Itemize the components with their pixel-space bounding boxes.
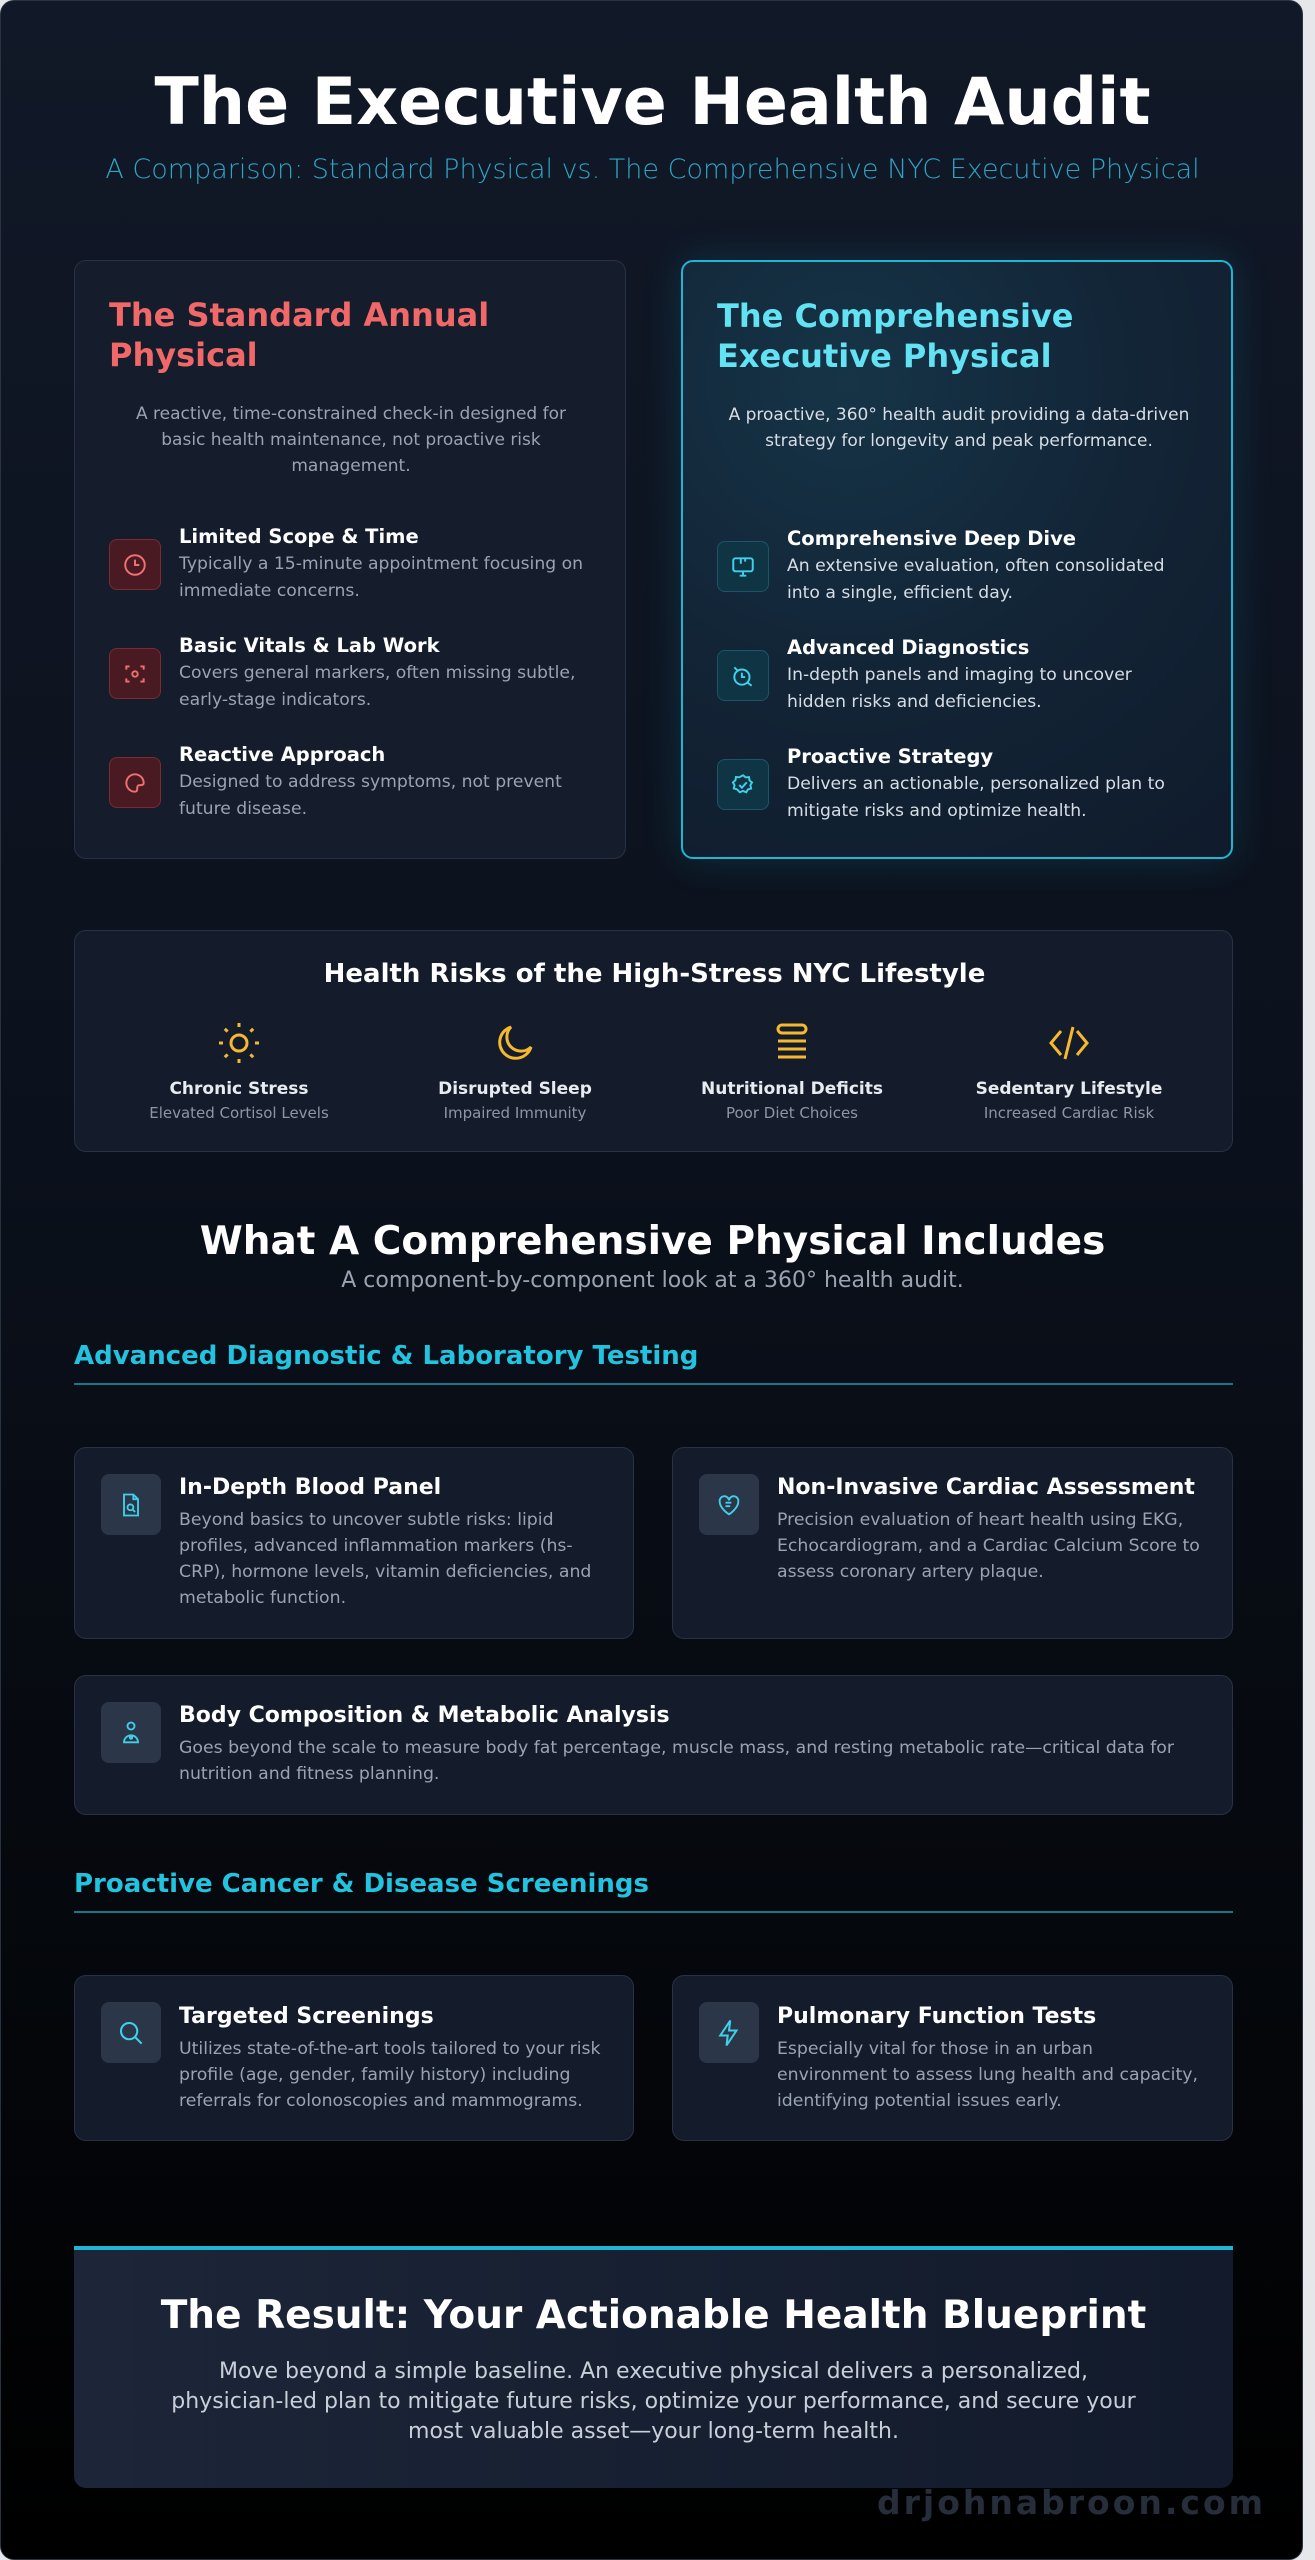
text: section subtitle: A component-by-component look at a 360° health audit.	[341, 1268, 964, 1293]
item: basic vitals	[109, 634, 575, 710]
risk: chronic stress: Chronic Stress	[169, 1079, 309, 1099]
risk: chronic stress: Elevated Cortisol Levels	[149, 1104, 329, 1122]
item: deep dive: into a single, efficient day.	[787, 583, 1013, 603]
icon: person	[101, 1702, 161, 1763]
panel: comprehensive physical	[681, 260, 1233, 859]
heading: health risks: Health Risks of the High-Stress NYC Lifestyle	[324, 959, 985, 989]
panel: health risks	[74, 930, 1233, 1152]
card: targeted screenings: referrals for colonoscopies and mammograms.	[179, 2091, 583, 2111]
item: reactive approach: Designed to address symptoms, not prevent	[179, 772, 562, 792]
risk: disrupted sleep: Disrupted Sleep	[438, 1079, 592, 1099]
text: result body: physician-led plan to mitigate future risks, optimize your performance, and secure your	[171, 2389, 1136, 2414]
icon: badge check	[717, 759, 769, 810]
item: advanced diagnostics	[717, 636, 1132, 712]
card: body composition	[74, 1675, 1233, 1815]
card: body composition: Body Composition & Metabolic Analysis	[179, 1703, 670, 1728]
card: targeted screenings: Targeted Screenings	[179, 2004, 434, 2029]
section heading: diagnostics: Advanced Diagnostic & Laboratory Testing	[74, 1341, 698, 1371]
section heading: diagnostics	[74, 1341, 1233, 1385]
card: blood panel: Beyond basics to uncover subtle risks: lipid profiles, advanced inflammation markers (hs-CRP), hormone levels, vitamin deficiencies, and metabolic function.	[179, 1510, 591, 1608]
item: advanced diagnostics: In-depth panels and imaging to uncover	[787, 665, 1132, 685]
text: comprehensive description: A proactive, 360° health audit providing a data-driven strategy for longevity and peak performance.	[729, 405, 1189, 451]
panel: standard physical	[74, 260, 626, 859]
card: cardiac: Non-Invasive Cardiac Assessment	[777, 1475, 1195, 1500]
text: result body: Move beyond a simple baseline. An executive physical delivers a personalized,	[219, 2359, 1088, 2384]
watermark: drjohnabroon.com	[877, 2483, 1266, 2522]
icon: sun	[219, 1023, 259, 1063]
item: limited scope	[109, 525, 583, 601]
card: pulmonary: Pulmonary Function Tests	[777, 2004, 1096, 2029]
card: targeted screenings: Utilizes state-of-the-art tools tailored to your risk	[179, 2039, 601, 2059]
text: standard description: A reactive, time-constrained check-in designed for basic health maintenance, not proactive risk management.	[136, 404, 566, 476]
item: proactive strategy: Proactive Strategy	[787, 745, 993, 768]
risk: nutritional deficits	[701, 1024, 883, 1122]
risk: chronic stress	[149, 1023, 329, 1122]
icon: stack	[776, 1024, 808, 1058]
card: pulmonary: environment to assess lung health and capacity,	[777, 2065, 1198, 2085]
heading: standard: The Standard Annual	[109, 296, 489, 334]
icon: scan	[109, 648, 161, 699]
text: result body	[171, 2359, 1136, 2444]
card: body composition: nutrition and fitness planning.	[179, 1764, 439, 1784]
icon: sticker	[109, 757, 161, 808]
card: body composition: Goes beyond the scale to measure body fat percentage, muscle mass, and resting metabolic rate—critical data for	[179, 1738, 1174, 1758]
risk: sedentary lifestyle	[976, 1026, 1162, 1122]
icon: monitor	[717, 541, 769, 592]
card: pulmonary: identifying potential issues early.	[777, 2091, 1062, 2111]
item: proactive strategy	[717, 745, 1165, 821]
heading: standard	[109, 296, 489, 374]
icon: search	[101, 2002, 161, 2063]
heading: result: The Result: Your Actionable Health Blueprint	[161, 2293, 1146, 2338]
item: reactive approach	[109, 743, 562, 819]
icon: clock	[109, 539, 161, 590]
icon: clock search	[717, 650, 769, 701]
card: pulmonary	[672, 1975, 1233, 2141]
heading: comprehensive: The Comprehensive	[717, 297, 1074, 335]
title: The Executive Health Audit	[154, 65, 1151, 140]
item: advanced diagnostics: Advanced Diagnostics	[787, 636, 1029, 659]
card: blood panel: In-Depth Blood Panel	[179, 1475, 441, 1500]
item: deep dive: An extensive evaluation, often consolidated	[787, 556, 1165, 576]
text: result body: most valuable asset—your long-term health.	[408, 2419, 899, 2444]
item: basic vitals: Covers general markers, often missing subtle,	[179, 663, 575, 683]
risk: nutritional deficits: Poor Diet Choices	[726, 1104, 858, 1122]
item: limited scope: immediate concerns.	[179, 581, 360, 601]
item: basic vitals: early-stage indicators.	[179, 690, 371, 710]
item: deep dive: Comprehensive Deep Dive	[787, 527, 1076, 550]
heading: standard: Physical	[109, 336, 258, 374]
item: limited scope: Limited Scope & Time	[179, 525, 419, 548]
subtitle: A Comparison: Standard Physical vs. The Comprehensive NYC Executive Physical	[105, 154, 1200, 185]
item: advanced diagnostics: hidden risks and deficiencies.	[787, 692, 1042, 712]
icon: moon	[498, 1026, 532, 1060]
item: limited scope: Typically a 15-minute appointment focusing on	[179, 554, 583, 574]
risk: nutritional deficits: Nutritional Deficits	[701, 1079, 883, 1099]
section heading: screenings: Proactive Cancer & Disease Screenings	[74, 1869, 649, 1899]
heading: comprehensive: Executive Physical	[717, 337, 1052, 375]
card: pulmonary: Especially vital for those in an urban	[777, 2039, 1093, 2059]
icon: code	[1049, 1026, 1089, 1060]
card: targeted screenings	[74, 1975, 634, 2141]
item: proactive strategy: mitigate risks and optimize health.	[787, 801, 1087, 821]
risk: sedentary lifestyle: Increased Cardiac Risk	[984, 1104, 1154, 1122]
risk: sedentary lifestyle: Sedentary Lifestyle	[976, 1079, 1162, 1099]
card: cardiac: Precision evaluation of heart health using EKG, Echocardiogram, and a Cardiac Calcium Score to assess coronary artery plaque.	[777, 1510, 1200, 1582]
item: reactive approach: Reactive Approach	[179, 743, 385, 766]
icon: lightning	[699, 2002, 759, 2063]
card: targeted screenings: profile (age, gender, family history) including	[179, 2065, 570, 2085]
icon: heart	[699, 1474, 759, 1535]
risk: disrupted sleep: Impaired Immunity	[444, 1104, 586, 1122]
heading: what a comprehensive physical includes: What A Comprehensive Physical Includes	[200, 1219, 1105, 1264]
section heading: screenings	[74, 1869, 1233, 1913]
item: proactive strategy: Delivers an actionable, personalized plan to	[787, 774, 1165, 794]
card: cardiac	[672, 1447, 1233, 1639]
item: basic vitals: Basic Vitals & Lab Work	[179, 634, 440, 657]
heading: comprehensive	[717, 297, 1074, 375]
item: reactive approach: future disease.	[179, 799, 307, 819]
item: deep dive	[717, 527, 1165, 603]
icon: document	[101, 1474, 161, 1535]
card: blood panel	[74, 1447, 634, 1639]
callout: result	[74, 2246, 1233, 2488]
risk: disrupted sleep	[438, 1026, 592, 1122]
